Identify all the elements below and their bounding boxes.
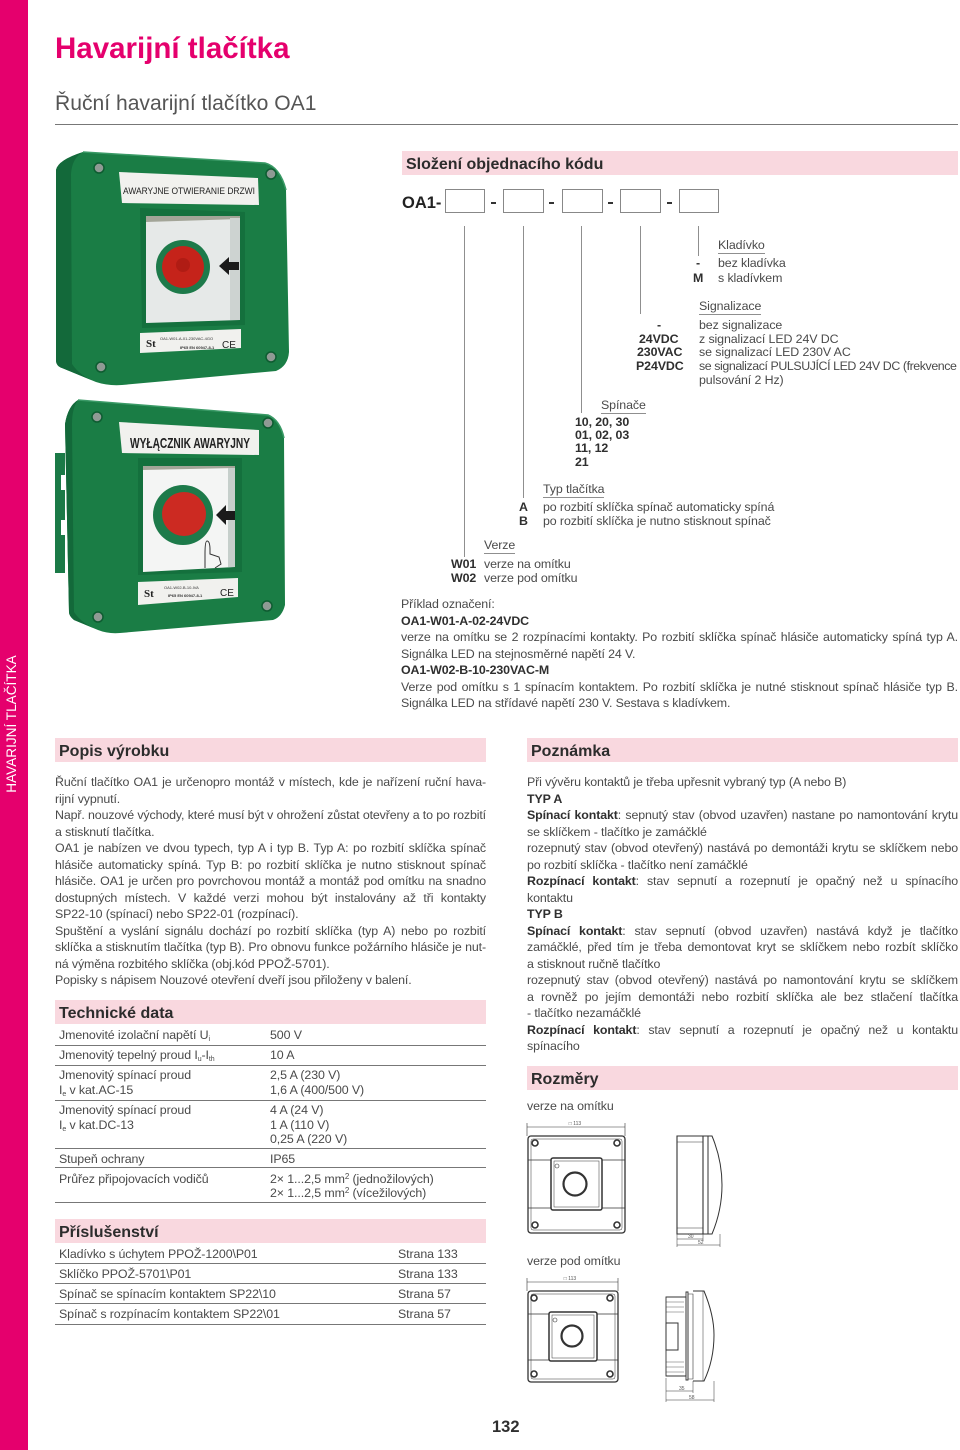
- product photo: emergency switch: St: [144, 588, 154, 600]
- option: signalling: bez signalizace: [699, 318, 782, 332]
- text block: ordering examples: OA1-W02-B-10-230VAC-M: [401, 663, 549, 677]
- text block: note: a rovněž po jejím demontáži nebo rozbití sklíčka ale bez stlačení tlačítka: [527, 990, 958, 1004]
- text block: product description: sklíčka a stisknutím tlačítka (typ B). Pro obnovu funkce požárního hlásiče je nut-: [55, 940, 486, 954]
- option: signalling: [636, 299, 957, 387]
- option: signalling: se signalizací LED 230V AC: [699, 345, 851, 359]
- table: technical data: 2× 1...2,5 mm2 (vícežilových): [270, 1186, 426, 1200]
- text block: ordering examples: OA1-W01-A-02-24VDC: [401, 614, 529, 628]
- table: technical data: 10 A: [270, 1048, 294, 1062]
- text block: product description: hlásiče. OA1 je určen pro povrchovou montáž a montáž pod omítku na snadno: [55, 874, 486, 888]
- heading: accessories: [55, 1219, 486, 1243]
- text block: note: [527, 775, 958, 1053]
- subtitle: [55, 89, 958, 125]
- option: contacts: 10, 20, 30: [575, 415, 629, 429]
- table: technical data: Ie v kat.DC-13: [59, 1118, 134, 1133]
- product photo: door opening button: St: [146, 338, 156, 350]
- option: signalling: -: [657, 318, 661, 332]
- text block: product description: [55, 775, 486, 987]
- table: accessories: Spínač s rozpínacím kontaktem SP22\01: [59, 1307, 280, 1321]
- product photo: emergency switch: CE: [220, 588, 234, 599]
- option: button type: po rozbití sklíčka spínač automaticky spíná: [543, 500, 774, 514]
- table: technical data: 1 A (110 V): [270, 1118, 329, 1132]
- table: accessories: Strana 133: [398, 1267, 458, 1281]
- table: accessories: Strana 133: [398, 1247, 458, 1261]
- option: hammer: -: [696, 256, 700, 270]
- option: button type: B: [519, 514, 528, 528]
- text block: note: rozepnutý stav (obvod otevřený) nastává po demontáži krytu se sklíčkem nebo: [527, 841, 958, 855]
- text block: ordering examples: Verze pod omítku s 1 spínacím kontaktem. Po rozbití sklíčka je nutné stisknout spínač hlásiče typ B.: [401, 680, 958, 694]
- drawing: surface version: □ 113: [569, 1121, 581, 1127]
- option: button type: [519, 482, 774, 528]
- text block: note: TYP A: [527, 792, 562, 806]
- drawing: surface version: 52: [698, 1240, 704, 1246]
- heading: note: Poznámka: [531, 743, 610, 760]
- label: surface version: verze na omítku: [527, 1099, 614, 1113]
- drawing: flush version: 58: [689, 1395, 695, 1401]
- text block: product description: a stisknutí tlačítka.: [55, 824, 154, 838]
- table: technical data: Ie v kat.AC-15: [59, 1083, 133, 1098]
- product photo: door opening button: [56, 151, 289, 386]
- text block: product description: dostupných místech. V každé verzi mohou být instalovány až tři kontakty: [55, 890, 486, 904]
- table: technical data: Jmenovitý tepelný proud Iu-Ith: [59, 1048, 215, 1063]
- text block: ordering examples: Signálka LED na střídavé napětí 230 V. Sestava s kladívkem.: [401, 696, 730, 710]
- table: accessories: Spínač se spínacím kontaktem SP22\10: [59, 1287, 276, 1301]
- option: contacts: Spínače: [601, 398, 646, 412]
- option: hammer: M: [693, 271, 703, 285]
- text block: note: Rozpínací kontakt: stav sepnutí a rozepnutí je opačný než u spínacího: [527, 874, 958, 888]
- table: technical data: 1,6 A (400/500 V): [270, 1083, 364, 1097]
- panel: order code composition: [402, 151, 958, 585]
- table: technical data: 2× 1...2,5 mm2 (jednožilových): [270, 1172, 434, 1186]
- option: version: verze pod omítku: [484, 571, 577, 585]
- table: accessories: Strana 57: [398, 1307, 451, 1321]
- option: version: [451, 538, 577, 585]
- text block: product description: ná výměna rozbitého sklíčka (obj.kód PPOŽ-5701).: [55, 956, 330, 970]
- option: signalling: P24VDC: [636, 359, 684, 373]
- page number: 132: [492, 1418, 520, 1436]
- option: version: Verze: [484, 538, 515, 552]
- text block: note: zamáčklé, před tím je třeba demontovat kryt se sklíčkem nebo rozbít sklíčko: [527, 940, 958, 954]
- order code boxes: [402, 189, 719, 557]
- text block: note: spínacího: [527, 1039, 580, 1053]
- table: accessories: Sklíčko PPOŽ-5701\P01: [59, 1267, 191, 1281]
- option: version: verze na omítku: [484, 557, 571, 571]
- option: signalling: se signalizací PULSUJÍCÍ LED 24V DC (frekvence: [699, 359, 957, 373]
- text block: note: Při vývěru kontaktů je třeba upřesnit vybraný typ (A nebo B): [527, 775, 846, 789]
- drawing: flush version: 35: [679, 1386, 685, 1392]
- option: contacts: [575, 398, 646, 469]
- sidebar label: HAVARIJNÍ TLAČÍTKA: [4, 655, 19, 793]
- table: technical data: 500 V: [270, 1028, 302, 1042]
- text block: ordering examples: [401, 597, 958, 710]
- option: hammer: bez kladívka: [718, 256, 786, 270]
- text block: product description: rijní vypnutí.: [55, 792, 120, 806]
- product photo: door opening button: AWARYJNE OTWIERANIE DRZWI: [123, 186, 255, 196]
- option: contacts: 11, 12: [575, 441, 608, 455]
- option: button type: po rozbití sklíčka je nutno stisknout spínač: [543, 514, 771, 528]
- text block: note: Spínací kontakt: sepnutý stav (obvod uzavřen) nastane po namontování krytu: [527, 808, 958, 822]
- heading: technical data: Technické data: [59, 1005, 173, 1022]
- heading: product description: [55, 738, 486, 762]
- option: hammer: s kladívkem: [718, 271, 782, 285]
- text block: note: rozepnutý stav (obvod otevřený) nastává po namontování krytu se sklíčkem: [527, 973, 958, 987]
- table: accessories: Kladívko s úchytem PPOŽ-1200\P01: [59, 1247, 258, 1261]
- table: technical data: Jmenovitý spínací proud: [59, 1068, 191, 1082]
- drawing: flush version: □ 113: [564, 1276, 576, 1282]
- text block: note: - tlačítko nezamáčklé: [527, 1006, 641, 1020]
- text block: product description: SP22-10 (spínací) nebo SP22-01 (rozpínací).: [55, 907, 298, 921]
- table: technical data: IP65: [270, 1152, 295, 1166]
- heading: note: [527, 738, 958, 762]
- text block: note: TYP B: [527, 907, 563, 921]
- product photo: door opening button: OA1-W01-A-01-230VAC-4GO: [160, 336, 213, 341]
- title: Havarijní tlačítka: [55, 32, 289, 65]
- option: version: W01: [451, 557, 476, 571]
- text block: ordering examples: verze na omítku se 2 rozpínacími kontakty. Po rozbití sklíčka spínač hlásiče automaticky spíná typ A.: [401, 630, 958, 644]
- sidebar: section tab: [0, 0, 28, 1450]
- text block: product description: Řuční tlačítko OA1 je určenopro montáž v místech, kde je nařízení ruční hava-: [55, 775, 486, 789]
- product photo: emergency switch: [55, 399, 285, 634]
- table: technical data: 4 A (24 V): [270, 1103, 323, 1117]
- text block: note: se sklíčkem - tlačítko je zamáčklé: [527, 824, 707, 838]
- product photo: emergency switch: OA1-W02-B-10-IVA: [164, 585, 199, 590]
- option: signalling: Signalizace: [699, 299, 761, 313]
- text block: note: Rozpínací kontakt: stav sepnutí a rozepnutí je opačný než u kontaktu: [527, 1022, 958, 1036]
- option: version: W02: [451, 571, 476, 585]
- table: technical data: Jmenovitý spínací proud: [59, 1103, 191, 1117]
- option: signalling: 230VAC: [637, 345, 682, 359]
- text block: product description: Spuštění a vyslání signálu dochází po rozbití sklíčka (typ A) nebo po rozbití: [55, 924, 486, 938]
- option: contacts: 21: [575, 455, 589, 469]
- text block: note: po rozbití sklíčka - tlačítko není zamáčklé: [527, 858, 748, 872]
- table: technical data: Stupeň ochrany: [59, 1152, 144, 1166]
- text block: product description: Např. nouzové východy, které musí být v ohrožení zůstat otevřeny a to po rozbití: [55, 808, 486, 822]
- text block: product description: OA1 je nabízen ve dvou typech, typ A i typ B. Typ A: po rozbití sklíčka spínač: [55, 841, 486, 855]
- drawing: flush version: [526, 1276, 714, 1402]
- order code boxes: OA1-: [402, 194, 441, 212]
- text block: note: Spínací kontakt: stav sepnutí (obvod uzavřen) nastává když je tlačítko: [527, 924, 958, 938]
- label: flush version: verze pod omítku: [527, 1254, 620, 1268]
- product photo: door opening button: IP65 EN 60947-8-1: [180, 345, 215, 350]
- option: signalling: z signalizací LED 24V DC: [699, 332, 838, 346]
- product photo: emergency switch: IP65 EN 60947-8-1: [168, 593, 203, 598]
- table: technical data: [55, 1028, 486, 1203]
- option: hammer: Kladívko: [718, 238, 765, 252]
- table: technical data: Průřez připojovacích vodičů: [59, 1172, 209, 1186]
- option: contacts: 01, 02, 03: [575, 428, 629, 442]
- text block: ordering examples: Příklad označení:: [401, 597, 495, 611]
- heading: product description: Popis výrobku: [59, 743, 169, 760]
- heading: accessories: Příslušenství: [59, 1224, 159, 1241]
- heading: technical data: [55, 1000, 486, 1024]
- heading: order code: Složení objednacího kódu: [406, 156, 603, 173]
- option: signalling: pulsování 2 Hz): [699, 373, 784, 387]
- option: signalling: 24VDC: [639, 332, 678, 346]
- option: button type: A: [519, 500, 528, 514]
- text block: note: kontaktu: [527, 890, 573, 904]
- text block: product description: hlásiče automaticky spíná. Typ B: po rozbití sklíčka je nutno stisknout spínač: [55, 858, 486, 872]
- table: accessories: Strana 57: [398, 1287, 451, 1301]
- option: button type: Typ tlačítka: [543, 482, 604, 496]
- drawing: surface version: [526, 1121, 722, 1247]
- subtitle: Řuční havarijní tlačítko OA1: [55, 92, 316, 115]
- drawing: surface version: 30: [688, 1234, 694, 1240]
- text block: ordering examples: Signálka LED na stejnosměrné napětí 24 V.: [401, 646, 635, 660]
- heading: order code: [402, 151, 958, 175]
- text block: product description: Popisky s nápisem Nouzové otevření dveří jsou přiloženy v balení.: [55, 973, 412, 987]
- product photo: door opening button: CE: [222, 340, 236, 351]
- table: technical data: 2,5 A (230 V): [270, 1068, 340, 1082]
- product photo: emergency switch: WYŁĄCZNIK AWARYJNY: [130, 435, 250, 452]
- table: technical data: Jmenovité izolační napětí Ui: [59, 1028, 210, 1043]
- heading: dimensions: [527, 1066, 958, 1090]
- option: hammer: [693, 238, 786, 285]
- table: technical data: 0,25 A (220 V): [270, 1132, 347, 1146]
- text block: note: a stisknout ručně tlačítko: [527, 956, 660, 970]
- table: accessories: [55, 1247, 486, 1325]
- heading: dimensions: Rozměry: [531, 1071, 599, 1088]
